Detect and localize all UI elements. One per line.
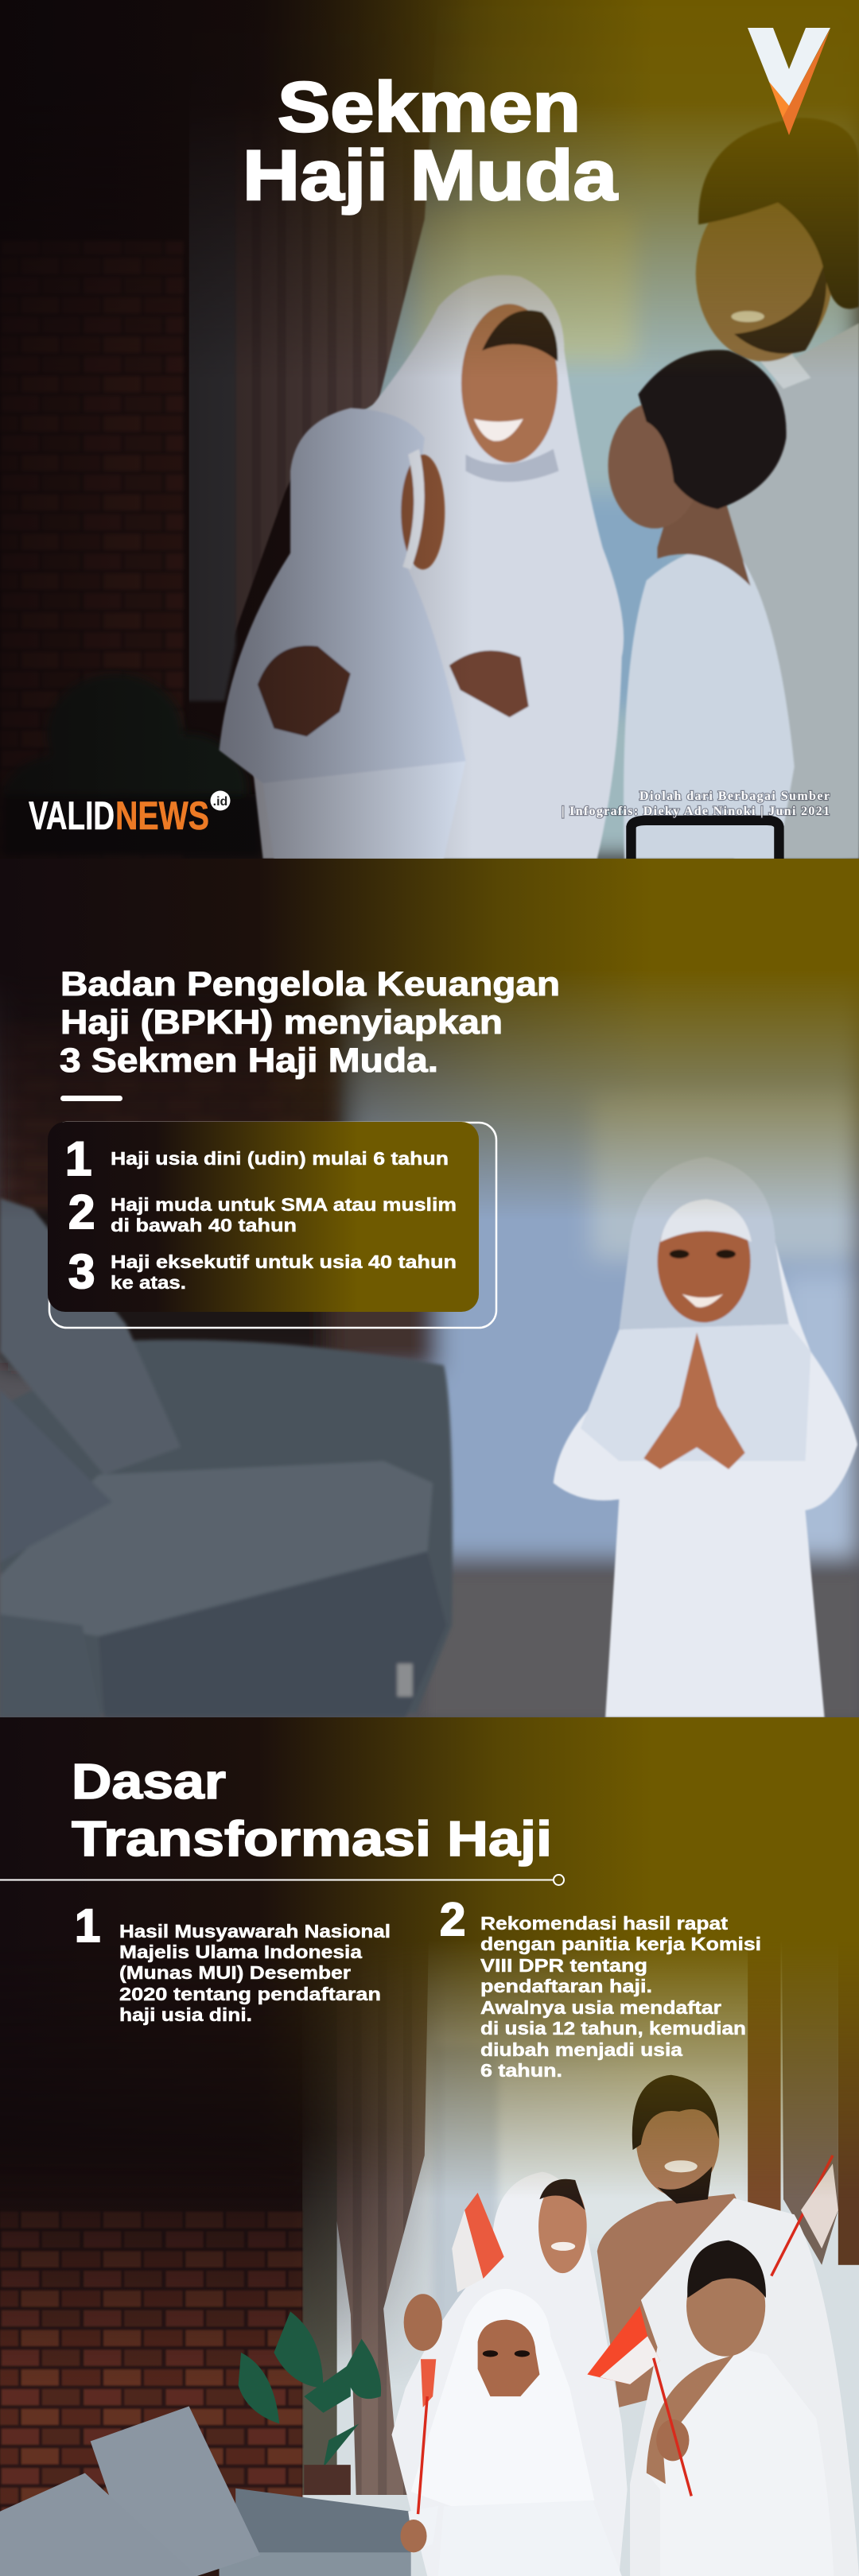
gradient overlay [113,0,859,367]
heading: Dasar [72,1755,226,1810]
point 2: 2 [440,1894,465,1946]
logo: Validnews: .id [213,795,227,809]
girl [400,2289,622,2576]
logo: Validnews: VALID [29,793,115,838]
brick wall [0,0,189,859]
item 1 [65,1132,449,1185]
plant [239,2311,381,2495]
father [696,118,859,859]
curtain [230,0,438,646]
point 1: 2020 tentang pendaftaran [119,1984,381,2004]
panel: segments photo [0,859,859,1717]
point 1: 1 [75,1900,100,1952]
gradient overlay [194,1717,859,2190]
point 2: Rekomendasi hasil rapat [480,1913,728,1934]
plant [0,673,263,859]
point 2: Awalnya usia mendaftar [480,1997,721,2018]
item 3: 3 [68,1245,95,1298]
point 2 [440,1894,761,2081]
point 2: VIII DPR tentang [480,1955,647,1976]
divider bar [60,1096,122,1101]
brick wall [0,1023,340,1209]
item 2: 2 [68,1185,95,1239]
point 2: dengan panitia kerja Komisi [480,1934,761,1954]
girl praying [554,1157,857,1717]
left dark fade [0,1968,440,2372]
timeline line [0,1875,564,1885]
curtain [336,1717,433,2495]
point 2: 6 tahun. [480,2060,562,2081]
item 2: Haji muda untuk SMA atau muslim [111,1194,457,1215]
sofa [0,1198,453,1717]
heading [60,965,560,1080]
point 2: di usia 12 tahun, kemudian [480,2018,746,2039]
wall strip [301,1717,337,2495]
window background [340,0,859,859]
point 1 [75,1900,391,2025]
item 1: 1 [65,1132,91,1185]
gradient overlay [0,859,859,1212]
heading: Transformasi Haji [72,1812,552,1867]
panel: segment list [48,1122,496,1328]
point 1: Hasil Musyawarah Nasional [119,1921,391,1942]
point 2: diubah menjadi usia [480,2039,682,2060]
item 2 [68,1185,457,1239]
icon: V logo [748,28,830,135]
box fill [48,1122,479,1312]
logo: Validnews [29,790,231,838]
flags [418,2155,838,2514]
heading: 3 Sekmen Haji Muda. [60,1042,438,1080]
suitcase handle [631,821,779,859]
boy [608,350,795,859]
mother [391,2172,628,2576]
source credit: Diolah dari Berbagai Sumber [639,789,830,803]
wood frame and right curtain [748,1717,859,2265]
panel: cover photo [32,0,859,859]
item 3: Haji eksekutif untuk usia 40 tahun [111,1251,457,1272]
wall column [173,0,235,701]
title: Sekmen [278,67,581,146]
sheer curtain shading [433,2046,748,2484]
point 1: Majelis Ulama Indonesia [119,1942,362,1962]
source credit: | Infografis: Dieky Ade Ninoki | Juni 2021 [562,805,830,818]
heading [72,1755,552,1867]
point 1: haji usia dini. [119,2004,252,2025]
brick wall [0,1717,302,2576]
item 3 [68,1245,457,1298]
panel: family photo [0,1717,859,2576]
item 2: di bawah 40 tahun [111,1215,297,1236]
father [597,2075,859,2576]
floor [427,1576,859,1717]
sofa and pillows [0,2406,411,2576]
title: Haji Muda [243,135,619,215]
point 1: (Munas MUI) Desember [119,1962,351,1983]
boy [647,2240,834,2576]
item 3: ke atas. [111,1272,186,1293]
point 2: pendaftaran haji. [480,1976,652,1996]
mother [247,275,624,859]
logo: Validnews: NEWS [115,793,209,838]
heading: Badan Pengelola Keuangan [60,965,560,1003]
box outline [49,1123,496,1328]
title [243,67,619,215]
source credit [562,789,830,818]
girl [220,408,465,859]
item 1: Haji usia dini (udin) mulai 6 tahun [111,1148,449,1169]
curtains and window [0,859,859,1560]
heading: Haji (BPKH) menyiapkan [60,1003,503,1042]
